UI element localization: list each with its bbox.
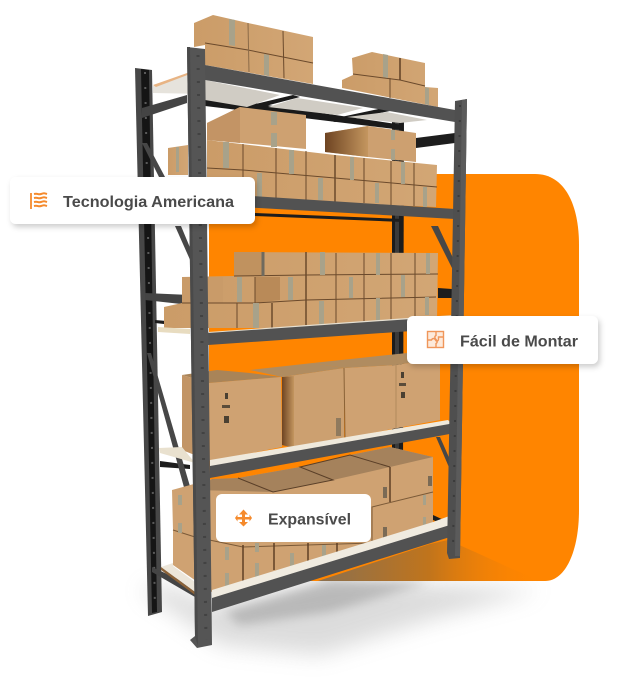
label: Tecnologia Americana: Tecnologia Americana: [63, 194, 234, 211]
icon: flag: [31, 193, 47, 209]
boxes: top shelf left stack: [194, 15, 313, 84]
front right upright: [447, 99, 467, 559]
floor shadow: [140, 578, 540, 655]
diagonal braces: [142, 143, 453, 520]
side and rear beams: [142, 95, 455, 597]
boxes: top shelf right stack: [342, 52, 438, 107]
card: Tecnologia Americana: [10, 177, 255, 224]
shadow over orange: [318, 540, 540, 581]
boxes: third shelf: [164, 252, 438, 328]
label: Fácil de Montar: Fácil de Montar: [460, 334, 578, 350]
label: Expansível: Expansível: [268, 512, 351, 528]
boxes: bottom shelf: [172, 447, 433, 592]
back right upright: [392, 118, 404, 470]
icon: puzzle: [428, 332, 444, 348]
boxes: fourth shelf: [182, 353, 440, 461]
card: Expansível: [216, 494, 371, 542]
front left upright: [187, 47, 212, 648]
shelf front beams: [205, 65, 455, 612]
boxes: second shelf: [168, 107, 437, 207]
card: Fácil de Montar: [407, 316, 598, 364]
back left upright: [135, 68, 162, 616]
icon: move arrows: [235, 510, 252, 526]
top shelf deck: [153, 72, 427, 130]
orange background shape: [209, 174, 579, 581]
shelf decks: [158, 315, 455, 600]
